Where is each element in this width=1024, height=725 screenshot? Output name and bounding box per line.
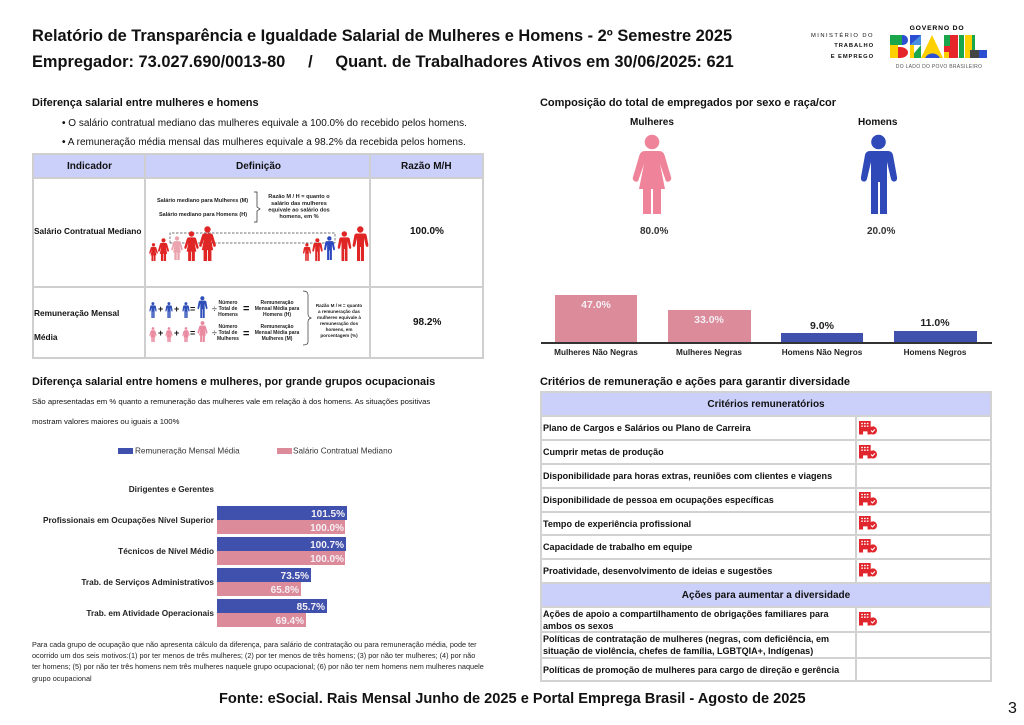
- icon: woman: [632, 134, 672, 214]
- logo: ministério: E EMPREGO: [831, 54, 874, 60]
- row: horas extras: [540, 463, 992, 489]
- row: apoio: ambos os sexos: [543, 620, 613, 630]
- diagram: remuneração média: =: [243, 303, 249, 315]
- row: proatividade: Proatividade, desenvolvimento de ideias e sugestões: [543, 566, 772, 576]
- heading: critérios: Critérios de remuneração e ações para garantir diversidade: [540, 376, 850, 388]
- text: explanation: mostram valores maiores ou iguais a 100%: [32, 417, 179, 426]
- text: footnote: ter homens; (5) por não ter três homens nem três mulheres naquele grupo ocupacional; (6) por não ter nem homens nem mulheres naquele: [32, 662, 484, 671]
- logo: governo do Brasil: GOVERNO DO: [910, 25, 964, 32]
- diagram: salário mediano: equivale ao salário dos: [268, 208, 330, 214]
- row: experiência: Tempo de experiência profissional: [543, 518, 691, 528]
- diagram: salário mediano: homens, em %: [279, 214, 319, 220]
- bar chart: occupational groups: 85.7%: [297, 602, 325, 613]
- page number: 3: [1008, 700, 1017, 717]
- table header: indicador: Indicador: [67, 161, 112, 172]
- bar chart: occupational groups: Dirigentes e Gerentes: [129, 485, 214, 494]
- legend: Remuneração Mensal Média: [135, 446, 240, 456]
- logo: ministério: MINISTÉRIO DO: [811, 33, 874, 39]
- row: contratação: Políticas de contratação de mulheres (negras, com deficiência, em: [543, 634, 829, 644]
- bar chart: occupational groups: 101.5%: [311, 509, 345, 520]
- bar chart: occupational groups: Trab. de Serviços Administrativos: [81, 578, 214, 587]
- diagram: salário mediano: Razão M / H = quanto o: [268, 194, 330, 200]
- diagram: remuneração média: homens, em: [326, 327, 352, 332]
- bar chart: occupational groups: 100.7%: [310, 540, 344, 551]
- logo: governo do Brasil: [890, 25, 987, 70]
- diagram: remuneração média: porcentagem (%): [320, 333, 358, 338]
- bar chart: occupational groups: Profissionais em Ocupações Nível Superior: [43, 516, 215, 525]
- row: contratação: [540, 631, 992, 659]
- bar chart: occupational groups: 69.4%: [276, 616, 304, 627]
- value: homens: 20.0%: [867, 226, 895, 237]
- logo: ministério: TRABALHO: [834, 43, 874, 49]
- employer line: Empregador: 73.027.690/0013-80 / Quant. de Trabalhadores Ativos em 30/06/2025: 621: [32, 53, 734, 71]
- bullet: salário contratual: • O salário contratual mediano das mulheres equivale a 100.0% do recebido pelos homens.: [62, 118, 467, 129]
- header: critérios remuneratórios: Critérios remuneratórios: [707, 399, 825, 410]
- logo: governo do Brasil: DO LADO DO POVO BRASILEIRO: [896, 64, 982, 70]
- diagram: salário mediano: salário das mulheres: [271, 201, 327, 207]
- row: metas: Cumprir metas de produção: [543, 447, 664, 457]
- icons: building check: [859, 421, 877, 626]
- diagram: remuneração média: +: [158, 304, 163, 314]
- row: horas extras: Disponibilidade para horas extras, reuniões com clientes e viagens: [543, 471, 832, 481]
- bar chart: composição: Homens Negros: [904, 348, 967, 357]
- diagram: remuneração média: Razão M / H = quanto: [316, 303, 362, 308]
- diagram: remuneração média: Número: [219, 324, 237, 330]
- row: apoio: Ações de apoio a compartilhamento de obrigações familiares para: [543, 608, 829, 618]
- legend: Salário Contratual Mediano: [293, 446, 393, 456]
- diagram: remuneração média: Remuneração: [260, 300, 294, 306]
- row label: salário contratual mediano: Salário Contratual Mediano: [34, 226, 141, 236]
- row: ocupações específicas: [540, 487, 992, 513]
- bar chart: composição: Homens Não Negros: [782, 348, 863, 357]
- value: remuneração: 98.2%: [413, 317, 441, 328]
- diagram: remuneração média: Homens: [218, 312, 238, 318]
- bullet: remuneração média: • A remuneração média mensal das mulheres equivale a 98.2% da recebida pelos homens.: [62, 137, 466, 148]
- bar chart: occupational groups: 100.0%: [310, 554, 344, 565]
- bar chart: composição: 33.0%: [694, 314, 725, 326]
- diagram: salário mediano: Salário mediano para Mulheres (M): [157, 198, 248, 204]
- bar chart: composição: 11.0%: [920, 317, 950, 329]
- value: salário contratual: 100.0%: [410, 226, 444, 237]
- row: ocupações específicas: Disponibilidade de pessoa em ocupações específicas: [543, 495, 774, 505]
- panel: indicator table: [32, 153, 484, 359]
- diagram: remuneração média: mulheres equivale à: [317, 315, 361, 320]
- bar chart: composição: 9.0%: [810, 320, 835, 332]
- row: promoção: Políticas de promoção de mulheres para cargo de direção e gerência: [543, 664, 839, 674]
- bar chart: composição: 47.0%: [581, 299, 612, 311]
- row: contratação: situação de violência, chefes de família, LGBTQIA+, Indígenas): [543, 646, 813, 656]
- text: explanation: São apresentadas em % quanto a remuneração das mulheres vale em relação à dos homens. As situações positivas: [32, 397, 430, 406]
- icon: man: [860, 134, 898, 214]
- row: plano de cargos: [540, 415, 992, 441]
- table header: definição: Definição: [236, 161, 281, 172]
- row: proatividade: [540, 558, 992, 584]
- text: footnote: [32, 640, 484, 683]
- bar chart: occupational groups: 65.8%: [271, 585, 299, 596]
- row label: remuneração mensal média: [34, 308, 119, 342]
- row label: remuneração mensal média: Média: [34, 332, 58, 342]
- diagram: salário mediano: [149, 192, 368, 261]
- diagram: remuneração média: =: [190, 328, 195, 338]
- diagram: remuneração média: Total de: [219, 306, 238, 312]
- text: footnote: ocorrido um dos seis motivos:(1) por ter menos de três mulheres; (2) por ter menos de três homens; (3) por não ter mulheres; (4) por não: [32, 651, 475, 660]
- diagram: remuneração média: Mensal Média para: [255, 330, 299, 336]
- bar chart: occupational groups: [43, 485, 347, 627]
- logo: ministério: [811, 32, 874, 60]
- diagram: remuneração média: +: [174, 304, 179, 314]
- diagram: remuneração média: ÷: [212, 328, 217, 338]
- diagram: remuneração média: Homens (H): [263, 312, 291, 318]
- heading: diferença salarial: Diferença salarial entre mulheres e homens: [32, 97, 259, 109]
- bar chart: occupational groups: 100.0%: [310, 523, 344, 534]
- row: experiência: [540, 511, 992, 536]
- bar chart: composição: [541, 295, 992, 357]
- title: Relatório de Transparência e Igualdade Salarial de Mulheres e Homens - 2º Semestre 2025: [32, 27, 732, 45]
- row: plano de cargos: Plano de Cargos e Salários ou Plano de Carreira: [543, 423, 751, 433]
- row: apoio: [540, 606, 992, 633]
- diagram: remuneração média: Total de: [219, 330, 238, 336]
- text: footnote: grupo ocupacional: [32, 674, 92, 683]
- footer: source: Fonte: eSocial. Rais Mensal Junho de 2025 e Portal Emprega Brasil - Agosto de 2025: [219, 691, 806, 707]
- diagram: remuneração média: Mulheres (M): [262, 336, 293, 342]
- diagram: remuneração média: remuneração dos: [320, 321, 359, 326]
- value: mulheres: 80.0%: [640, 226, 668, 237]
- diagram: salário mediano: Salário mediano para Homens (H): [159, 212, 247, 218]
- legend: [118, 446, 393, 456]
- header: ações: Ações para aumentar a diversidade: [682, 590, 850, 601]
- bar chart: occupational groups: 73.5%: [281, 571, 309, 582]
- column divider: [855, 416, 857, 582]
- header: critérios remuneratórios: [540, 391, 992, 417]
- bar chart: occupational groups: Técnicos de Nível Médio: [118, 547, 214, 556]
- panel: criteria table: [540, 391, 992, 682]
- text: footnote: Para cada grupo de ocupação que não apresenta cálculo da diferença, para salário de contratação ou para remuneração média, pode ter: [32, 640, 477, 649]
- diagram: remuneração média: Mensal Média para: [255, 306, 299, 312]
- bar chart: occupational groups: Trab. em Atividade Operacionais: [86, 609, 214, 618]
- diagram: remuneração média: Remuneração: [260, 324, 294, 330]
- label: mulheres: Mulheres: [630, 117, 674, 128]
- diagram: remuneração média: +: [158, 328, 163, 338]
- label: homens: Homens: [858, 117, 897, 128]
- bar chart: composição: Mulheres Não Negras: [554, 348, 638, 357]
- row: equipe: [540, 534, 992, 560]
- header: ações: [540, 582, 992, 608]
- diagram: remuneração média: ÷: [212, 304, 217, 314]
- diagram: remuneração média: [149, 290, 362, 346]
- diagram: remuneração média: =: [243, 328, 249, 340]
- row: metas: [540, 439, 992, 465]
- diagram: remuneração média: a remuneração das: [318, 309, 360, 314]
- diagram: remuneração média: Mulheres: [217, 336, 239, 342]
- table header: razão: Razão M/H: [401, 161, 452, 172]
- row: equipe: Capacidade de trabalho em equipe: [543, 542, 692, 552]
- row: promoção: [540, 657, 992, 682]
- bar chart: composição: Mulheres Negras: [676, 348, 742, 357]
- text: explanation: [32, 397, 430, 426]
- row label: remuneração mensal média: Remuneração Mensal: [34, 308, 119, 318]
- diagram: remuneração média: =: [190, 304, 195, 314]
- diagram: remuneração média: +: [174, 328, 179, 338]
- diagram: remuneração média: Número: [219, 300, 237, 306]
- heading: grupos ocupacionais: Diferença salarial entre homens e mulheres, por grande grupos ocupacionais: [32, 376, 435, 388]
- heading: composição: Composição do total de empregados por sexo e raça/cor: [540, 97, 836, 109]
